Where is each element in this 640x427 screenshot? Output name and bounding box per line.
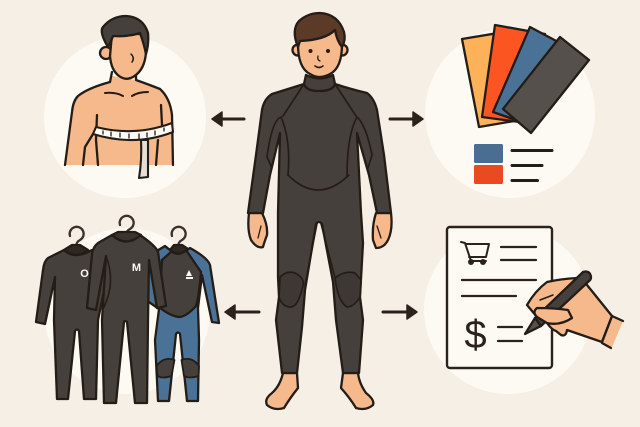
panel: checkout form — [424, 226, 623, 394]
legend lines — [512, 150, 552, 180]
icon: head — [292, 13, 348, 77]
legend swatches — [474, 144, 503, 184]
index finger — [534, 308, 572, 324]
pen — [535, 272, 591, 326]
blue swatch — [493, 27, 577, 126]
hand back — [527, 278, 612, 342]
panel: wetsuit sizes — [36, 216, 219, 403]
icon: right wetsuit size blue — [146, 227, 219, 401]
icon: hand with pen — [525, 272, 623, 348]
icon: middle wetsuit size M — [87, 216, 166, 403]
wetsuit seams — [267, 84, 372, 307]
icon: document — [447, 227, 552, 368]
size label O: O — [80, 268, 89, 280]
icon: left wetsuit size O — [36, 227, 110, 399]
icon: feet — [266, 373, 373, 409]
arrow: to measurement — [212, 112, 244, 126]
text lines — [462, 247, 536, 341]
orange swatch — [462, 31, 526, 127]
icon: measuring tape — [93, 123, 173, 178]
panel: colour swatches — [425, 25, 595, 198]
icon: swatch fan — [462, 25, 589, 133]
dollar sign: $ — [464, 313, 487, 357]
main figure in wetsuit — [248, 13, 392, 409]
arrow: to wetsuit sizes — [225, 305, 259, 319]
arrow: to colour swatches — [390, 112, 423, 126]
size label M: M — [132, 262, 141, 274]
arrow: to checkout — [383, 305, 417, 319]
panel: chest measurement — [44, 16, 206, 198]
icon: wetsuit body — [248, 84, 391, 373]
icon: hands — [248, 213, 392, 248]
grey swatch — [503, 37, 589, 133]
icon: shopping cart — [461, 242, 489, 264]
icon: head with short hair — [100, 16, 148, 79]
icon: neck collar — [304, 75, 335, 91]
icon: torso — [65, 72, 173, 165]
red swatch — [482, 25, 545, 123]
